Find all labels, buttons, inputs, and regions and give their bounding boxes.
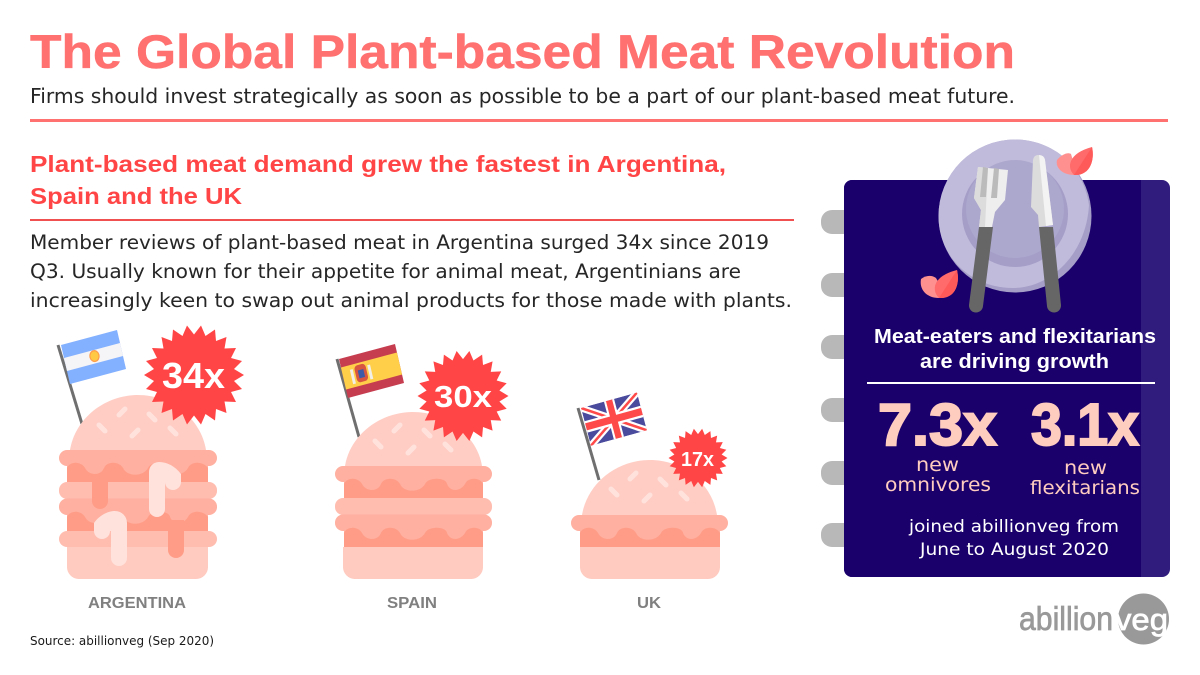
logo: abillionveg: veg [1115, 602, 1168, 637]
body text: Member reviews of plant-based meat in Argentina surged 34x since 2019 [30, 231, 769, 254]
icon: plate and cutlery [938, 140, 1092, 313]
panel note [908, 517, 1119, 560]
body text: increasingly keen to swap out animal products for those made with plants. [30, 289, 792, 312]
title: The Global Plant-based Meat Revolution [30, 25, 1015, 78]
badge: 17x: 17x [681, 449, 714, 471]
fork [969, 167, 1008, 313]
panel heading: Meat-eaters and flexitarians [874, 326, 1156, 348]
section heading [30, 151, 726, 209]
burger: UK [571, 392, 728, 612]
label: Argentina: ARGENTINA [88, 595, 186, 612]
logo: abillionveg [1019, 594, 1169, 644]
flag: Spain [337, 344, 404, 437]
badge: 34x [144, 326, 244, 424]
panel heading: are driving growth [920, 351, 1109, 373]
stat: 7.3x new omnivores: omnivores [885, 474, 991, 496]
notebook tabs [821, 210, 861, 547]
label: UK: UK [637, 595, 662, 612]
stat: 3.1x new flexitarians [1030, 392, 1140, 499]
badge: 17x [668, 429, 728, 487]
stat: 7.3x new omnivores [878, 392, 997, 496]
icon: leaves top [1057, 147, 1093, 175]
stat: 3.1x new flexitarians: 3.1x [1031, 392, 1139, 458]
icon: leaves bottom [921, 270, 958, 298]
panel heading [874, 326, 1156, 373]
burger: Spain [335, 344, 508, 612]
stat: 3.1x new flexitarians: new [1064, 457, 1107, 479]
badge: 34x: 34x [162, 355, 225, 396]
subtitle: Firms should invest strategically as soon as possible to be a part of our plant-based meat future. [30, 84, 1015, 108]
panel: notebook [821, 140, 1170, 577]
flag: Argentina [58, 330, 126, 424]
logo: abillionveg: abillion [1019, 600, 1113, 637]
label: Spain: SPAIN [387, 595, 437, 612]
burger: Argentina [58, 326, 244, 612]
section heading: Spain and the UK [30, 183, 242, 209]
stat: 7.3x new omnivores: 7.3x [878, 392, 997, 458]
body text: Q3. Usually known for their appetite for animal meat, Argentinians are [30, 260, 741, 283]
badge: 30x: 30x [434, 379, 493, 414]
stat: 7.3x new omnivores: new [916, 454, 959, 476]
stat: 3.1x new flexitarians: flexitarians [1030, 477, 1140, 499]
knife [1031, 155, 1061, 313]
body text [30, 231, 792, 312]
panel note: joined abillionveg from [908, 517, 1119, 537]
panel note: June to August 2020 [919, 540, 1109, 560]
flag: UK [578, 392, 647, 480]
badge: 30x [418, 351, 508, 441]
section heading: Plant-based meat demand grew the fastest in Argentina, [30, 151, 726, 177]
source note: Source: abillionveg (Sep 2020) [30, 634, 214, 648]
